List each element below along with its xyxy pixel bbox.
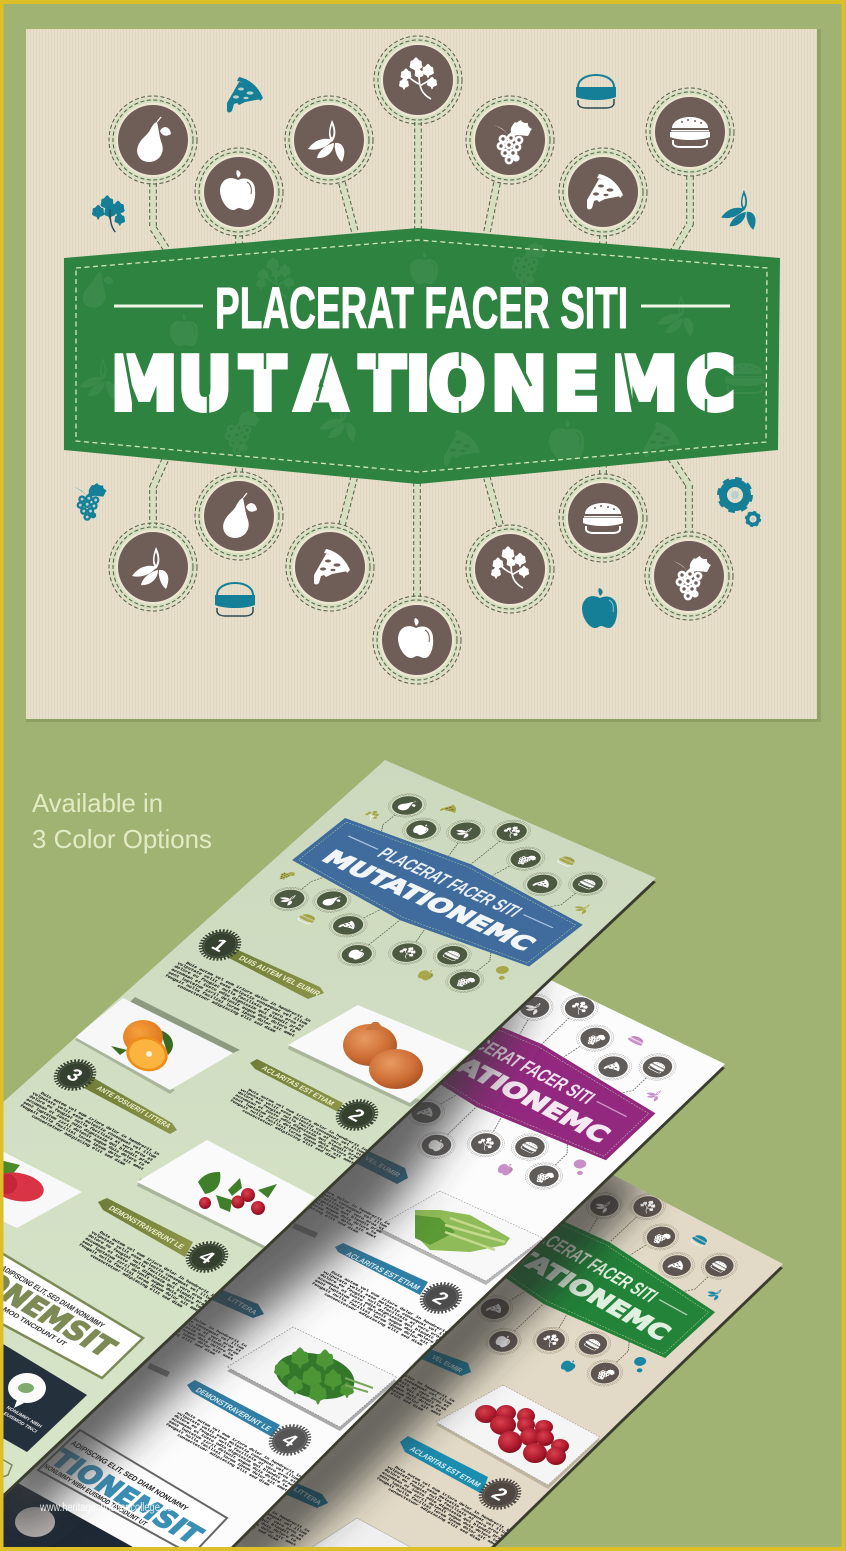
paragraph <box>15 1089 161 1175</box>
paragraph <box>390 1375 454 1416</box>
badge: 1 <box>198 929 242 961</box>
node: pear <box>109 96 197 184</box>
photo card: cherries <box>436 1385 600 1489</box>
white headline box: NONUMMY NIBH EUISMOD TINCIDUNT UT <box>42 1464 149 1528</box>
bar: vel eumir: VEL EUMIR <box>363 1156 401 1179</box>
bar: littera: LITTERA <box>226 1296 258 1316</box>
small photo card <box>312 1518 411 1547</box>
node: lower grapes <box>645 532 733 620</box>
icon: teal apple <box>582 588 617 628</box>
white headline box: TIONEMSIT <box>44 1444 210 1549</box>
bar: demonstraverunt le: DEMONSTRAVERUNT LE <box>107 1204 186 1251</box>
dark info box: EUISMOD TINCI <box>2 1411 39 1435</box>
bar: aclaritas est etiam: ACLARITAS EST ETIAM <box>344 1250 422 1292</box>
mini infographic header <box>408 994 676 1190</box>
badge: 2 <box>336 1099 378 1131</box>
node: banana <box>285 96 373 184</box>
badge: 4 <box>180 1237 234 1277</box>
badge: 2: 2 <box>486 1484 512 1505</box>
mini infographic header: MUTATIONEMC <box>316 846 542 955</box>
node: pizza <box>559 148 647 236</box>
photo card: onions <box>288 1005 470 1107</box>
sheet: pale green blue version <box>0 750 670 1510</box>
node: lower apple <box>373 596 461 684</box>
dark info box: NONUMMY NIBH <box>5 1405 44 1429</box>
white headline box: ADIPISCING ELIT, SED DIAM NONUMMY <box>0 1264 107 1330</box>
bar: vel eumir: VEL EUMIR <box>430 1355 463 1374</box>
badge: 4: 4 <box>193 1247 219 1268</box>
node: lower parsley <box>466 525 554 613</box>
bar: littera <box>212 1290 264 1318</box>
bar: ante posuerit littera: ANTE POSUERIT LITTERA <box>95 1084 174 1130</box>
node: lower burger <box>559 474 647 562</box>
bar: aclaritas est etiam: ACLARITAS EST ETIAM <box>408 1445 483 1489</box>
icon: teal grapes <box>74 483 107 521</box>
mini infographic header: MUTATIONEMC <box>390 1023 616 1147</box>
paragraph <box>310 1191 390 1238</box>
paragraph <box>254 1511 310 1546</box>
icon: teal pizza <box>227 77 263 112</box>
photo card: strawberries <box>0 1150 82 1228</box>
badge: 3: 3 <box>61 1065 87 1086</box>
icon: gears <box>719 479 760 526</box>
mini infographic header: PLACERAT FACER SITI <box>517 1219 663 1306</box>
badge: 4 <box>268 1424 312 1456</box>
badge: 2 <box>420 1282 462 1314</box>
connectors: top row <box>153 122 690 254</box>
mini infographic header: PLACERAT FACER SITI <box>372 845 527 920</box>
cast shadow from purple sheet <box>235 1175 665 1547</box>
photo card: parsley <box>227 1327 397 1431</box>
bar: littera: LITTERA <box>292 1487 322 1506</box>
badge: 2 <box>478 1478 522 1510</box>
connectors: bottom row <box>153 458 689 597</box>
paragraph <box>166 1412 302 1492</box>
node: lower pear <box>195 472 283 560</box>
cast shadow from green sheet <box>0 960 540 1525</box>
bar: littera <box>286 1484 328 1508</box>
badge: 2: 2 <box>343 1105 369 1126</box>
dark info box <box>0 1330 87 1452</box>
icon: teal banana <box>721 190 756 230</box>
title: stencil word: MUTATIONEMC <box>111 343 735 427</box>
photo card: berries <box>137 1140 315 1252</box>
text: available in 3 color options: Available in <box>32 788 163 818</box>
faint banner pattern <box>79 242 765 466</box>
title line right <box>641 304 730 308</box>
icon: teal burger <box>576 75 616 108</box>
paragraph <box>377 1466 509 1545</box>
bar: vel eumir <box>422 1350 471 1376</box>
mini infographic header <box>270 794 607 993</box>
fold strip <box>292 1223 318 1238</box>
white headline box: ADIPISCING ELIT, SED DIAM NONUMMY <box>69 1439 191 1513</box>
paragraph <box>176 1318 247 1360</box>
mini infographic header: PLACERAT FACER SITI <box>445 1022 599 1108</box>
paragraph <box>226 1086 368 1168</box>
bar: vel eumir <box>357 1152 408 1184</box>
banner <box>64 228 780 484</box>
paragraph <box>165 962 310 1037</box>
panel: hero card <box>26 29 821 722</box>
node: lower banana <box>109 523 197 611</box>
icon: teal burger lower <box>215 583 255 616</box>
badge: 3 <box>48 1055 102 1095</box>
text: available in 3 color options <box>32 788 212 854</box>
node: apple <box>195 148 283 236</box>
mini infographic header <box>476 1192 738 1386</box>
node: lower pizza <box>286 523 374 611</box>
white headline box <box>0 1240 143 1378</box>
photo card: orange <box>75 997 240 1094</box>
paragraph <box>74 1228 217 1317</box>
badge: 1: 1 <box>206 935 232 956</box>
bar: aclaritas est etiam: ACLARITAS EST ETIAM <box>260 1064 336 1107</box>
title line left <box>114 304 203 308</box>
paragraph <box>312 1270 447 1346</box>
watermark text: www.heritagechristiancollege.com <box>39 1502 180 1514</box>
node: burger <box>646 88 734 176</box>
icon: teal parsley <box>92 195 125 232</box>
white headline box: MOD TINCIDUNT UT <box>1 1307 68 1348</box>
node: parsley <box>374 36 462 124</box>
photo card: lettuce <box>377 1191 543 1285</box>
bar: duis autem vel eumir: DUIS AUTEM VEL EUMIR <box>237 954 323 997</box>
bar: demonstraverunt le: DEMONSTRAVERUNT LE <box>194 1386 273 1433</box>
node: grapes <box>466 96 554 184</box>
title: top line: PLACERAT FACER SITI <box>215 276 628 341</box>
text: available in 3 color options: 3 Color Options <box>32 824 212 854</box>
sheet: white purple version <box>4 980 725 1547</box>
fold strip <box>147 1363 170 1377</box>
sheet: tan green version <box>170 1135 800 1551</box>
badge: 4: 4 <box>276 1430 302 1451</box>
badge: 2: 2 <box>427 1288 453 1309</box>
mini infographic header: MUTATIONEMC <box>464 1220 676 1345</box>
small outlined tag <box>0 1455 12 1480</box>
dark footer box <box>4 1484 133 1547</box>
